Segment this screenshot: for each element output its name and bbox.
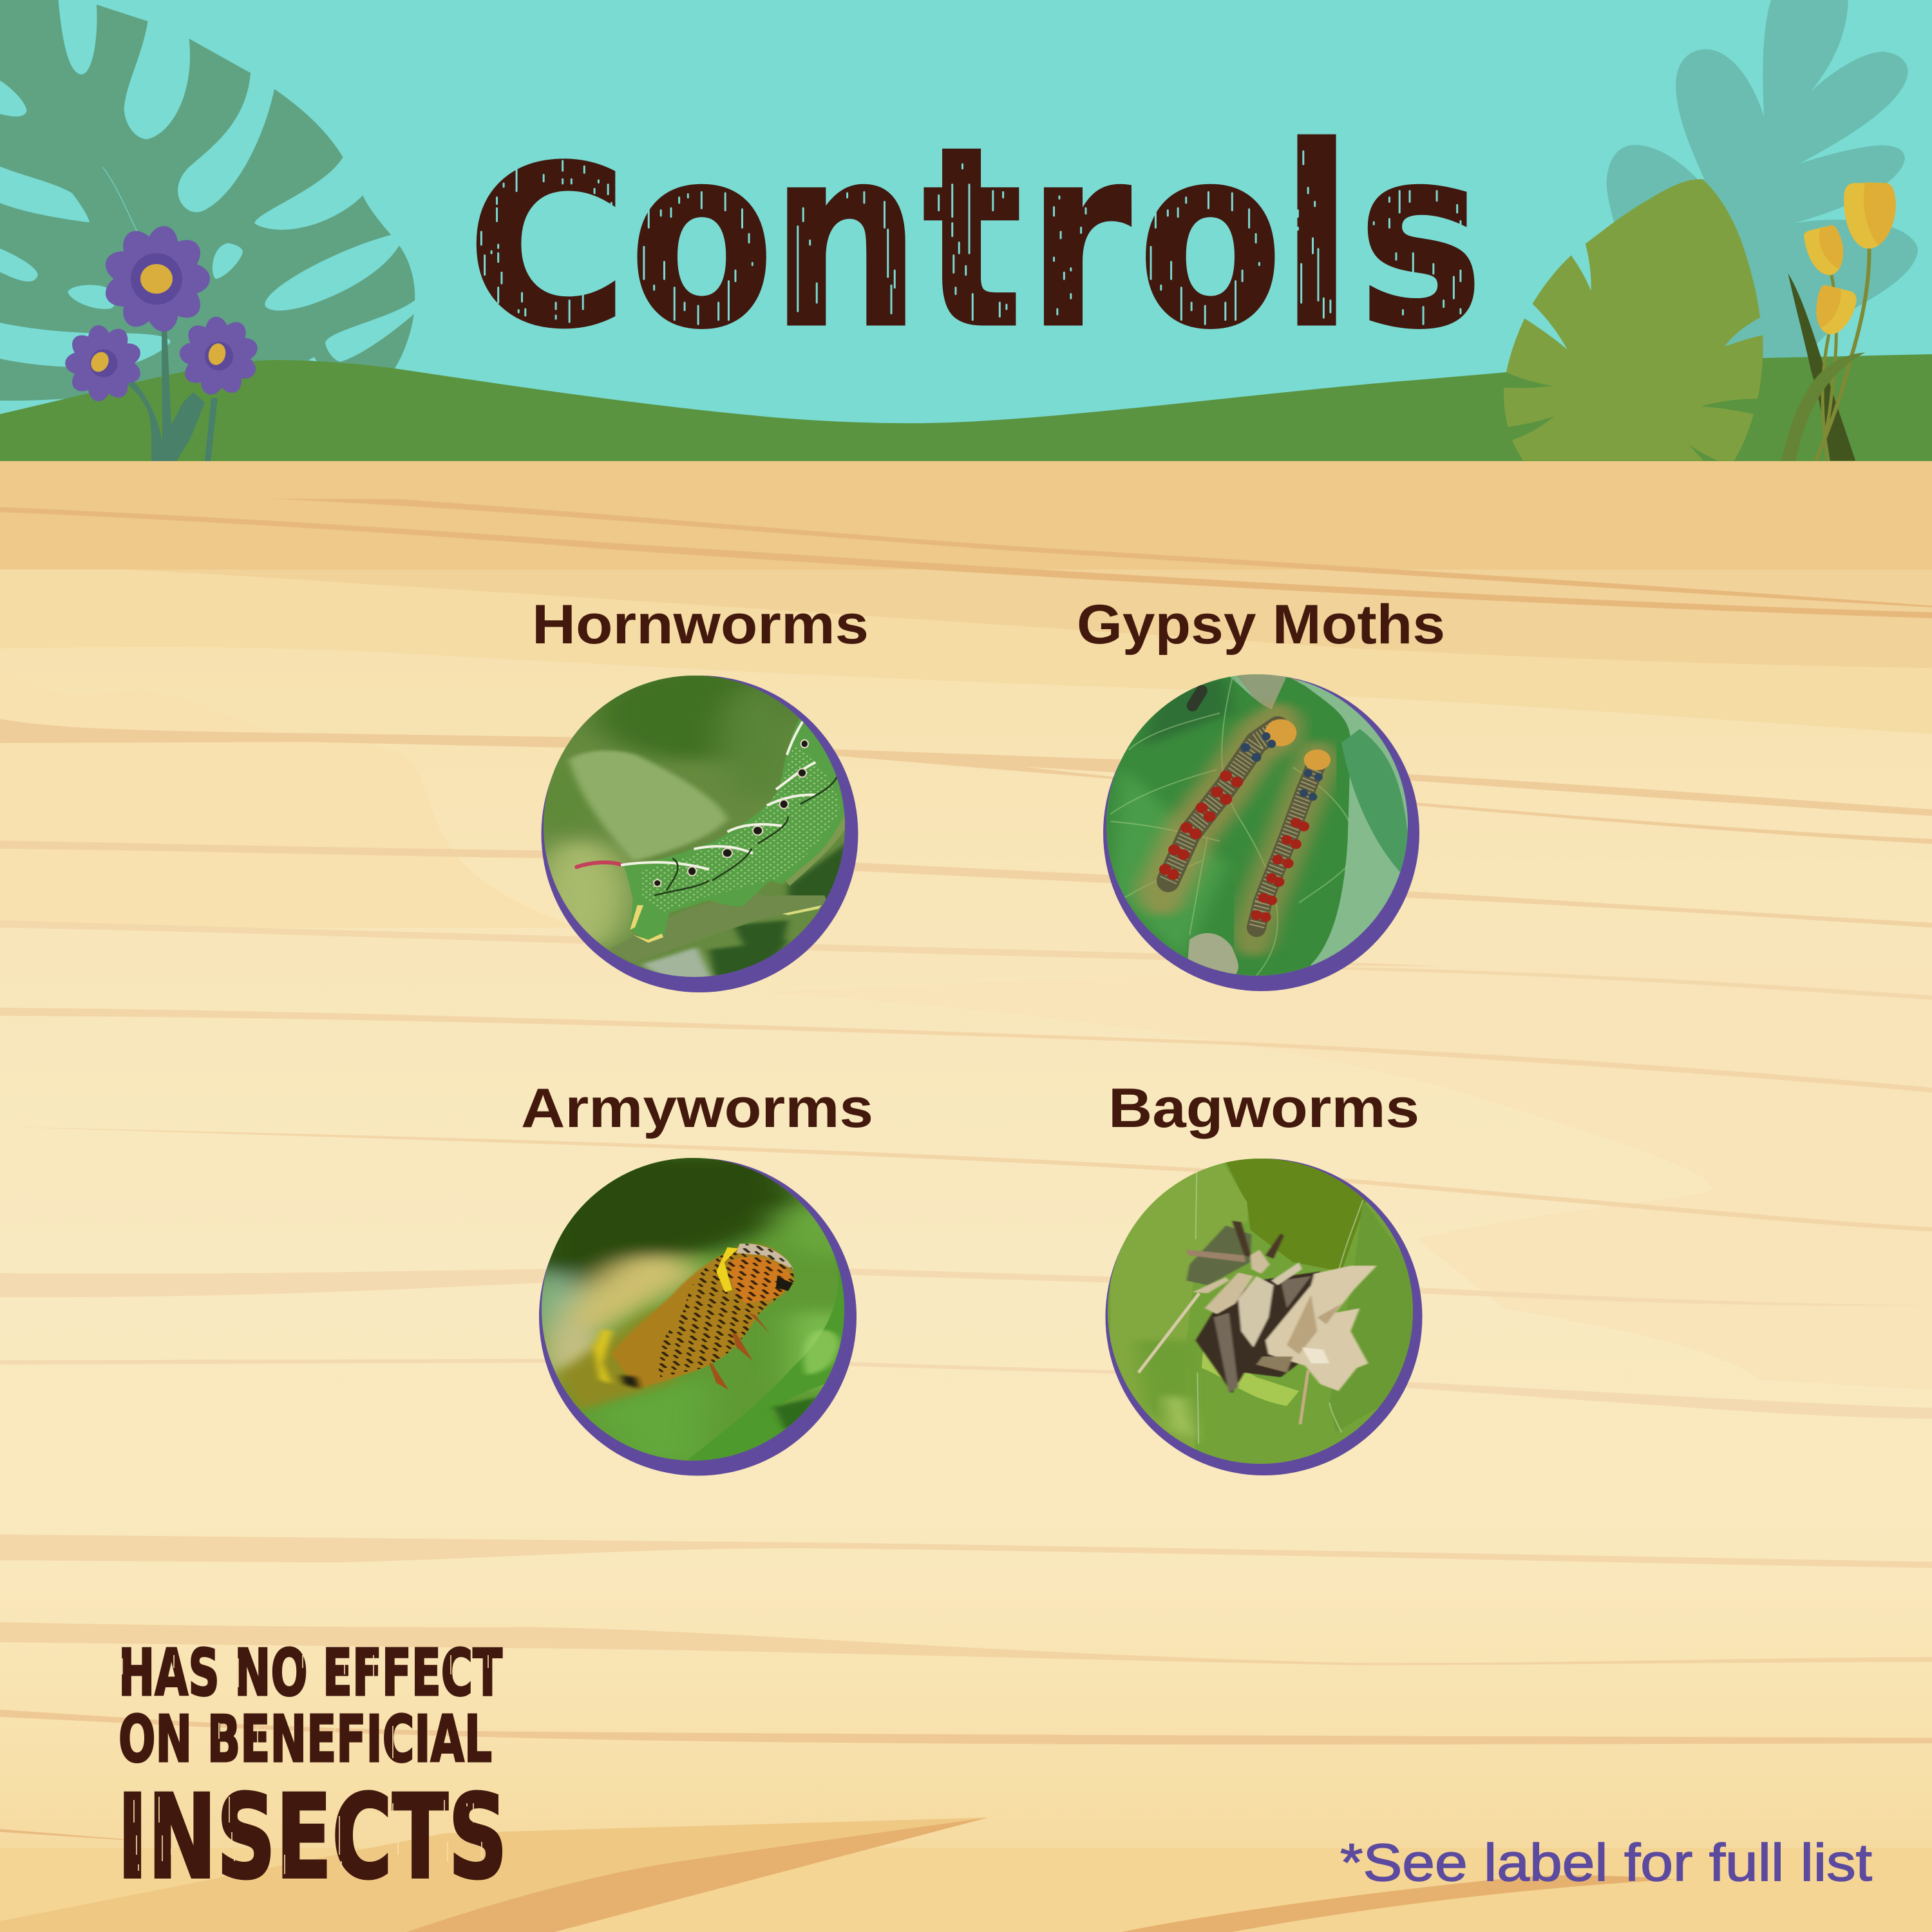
icon: hornworm photo circle [541, 676, 858, 992]
title: s [1358, 93, 1484, 384]
text block: has no effect on beneficial insects: HAS NO EFFECT [118, 1635, 502, 1710]
icon: bagworm photo circle [1105, 1159, 1422, 1475]
heading: Bagworms: Bagworms [1108, 1077, 1419, 1139]
text block: has no effect on beneficial insects: ON BENEFICIAL [118, 1701, 492, 1777]
panel: wood background [0, 461, 1932, 1932]
panel: sky header [0, 0, 1932, 461]
heading: Gypsy Moths: Gypsy Moths [1077, 594, 1445, 656]
heading: Hornworms: Hornworms [532, 594, 869, 656]
icon: gypsy moth photo circle [1103, 674, 1419, 991]
title: o [629, 93, 775, 384]
icon: green banana leaf and tulips right [1504, 179, 1896, 460]
title: l [1280, 93, 1353, 384]
title: r [1027, 93, 1133, 384]
title: t [922, 93, 1023, 384]
footnote: see label: *See label for full list [1340, 1833, 1872, 1892]
text block: has no effect on beneficial insects [117, 1635, 507, 1905]
title: C [466, 118, 629, 377]
heading: Armyworms: Armyworms [521, 1077, 873, 1139]
icon: green hill [0, 354, 1932, 461]
icon: armyworm photo circle [539, 1158, 857, 1476]
title: n [770, 93, 921, 384]
icon: purple flowers [52, 223, 268, 461]
icon: monstera leaf left [0, 0, 415, 426]
title: o [1137, 93, 1283, 384]
icon: pale teal background leaf right [1607, 0, 1918, 380]
title [466, 93, 1484, 384]
text block: has no effect on beneficial insects: INSECTS [117, 1770, 507, 1905]
